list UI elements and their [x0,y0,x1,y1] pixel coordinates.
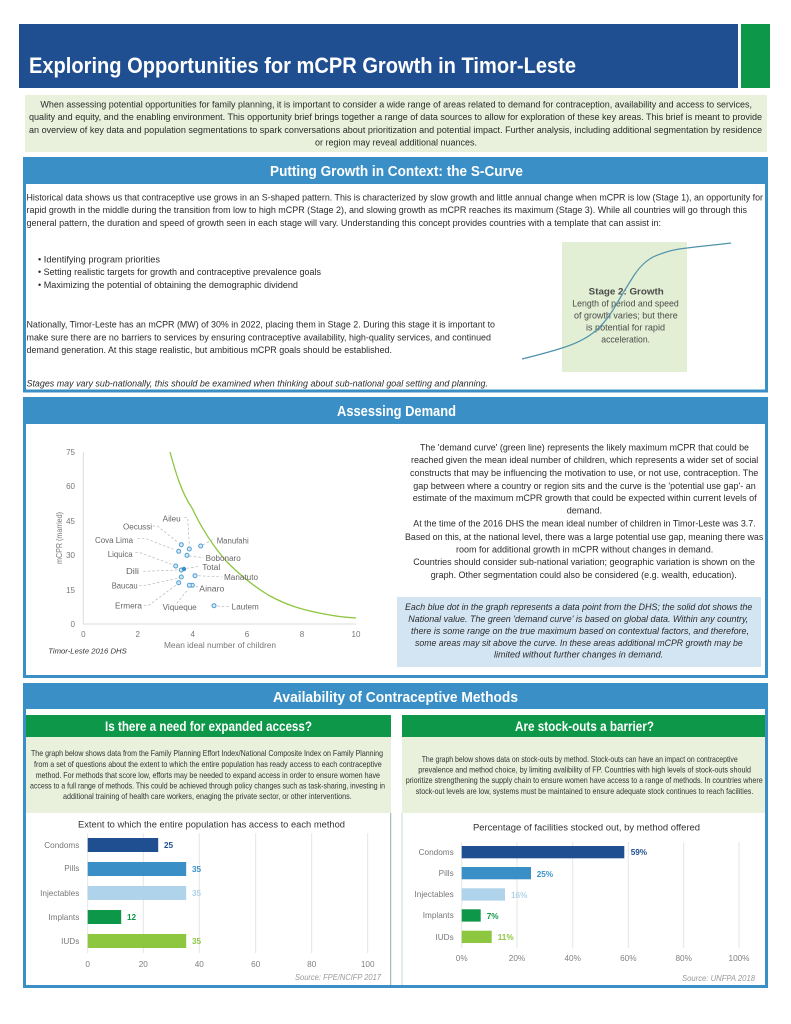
text block: demand curve explanation: gap between where a country or region sits and the curve is the 'potential use gap'- an [413,481,756,492]
chart: demand curve scatter: mCPR (married) [55,512,64,564]
panel: S-curve context [23,157,768,391]
stage 2 diagram: is potential for rapid [586,322,665,332]
italic note: Stages may vary sub-nationally, this should be examined when thinking about sub-national goal setting and planning. [26,378,488,390]
bar chart: access by method: 80 [307,960,317,969]
bar chart: stock-outs by method: 80% [676,954,692,963]
callout: reading the graph: there is some range on the true maximum based on contextual factors, and therefore, [411,626,749,637]
chart: demand curve scatter: 0 [71,620,76,629]
bar chart: stock-outs by method [415,822,756,983]
sub-heading: stock-outs: Are stock-outs a barrier? [515,719,654,734]
text block: expanded access [30,748,385,801]
bar chart: stock-outs by method: Injectables [415,890,454,899]
text block: demand curve explanation: estimate of the maximum mCPR growth that could be expected within current levels of [413,493,757,504]
intro text block: an overview of key data and population segmentations to spark conversations about prioritization and potential impact. Further analysis, including additional segmentation by residence [29,125,762,136]
bar chart: stock-outs by method: Source: UNFPA 2018 [682,974,756,983]
chart: demand curve scatter: 6 [245,630,250,639]
chart: demand curve scatter: 60 [66,482,76,491]
heading: S-curve: Putting Growth in Context: the S-Curve [270,164,523,180]
bar chart: access by method: Extent to which the entire population has access to each method [78,820,345,830]
bar chart: stock-outs by method: IUDs [435,933,454,942]
chart: demand curve scatter: 8 [300,630,305,639]
intro text block: When assessing potential opportunities for family planning, it is important to consider a wide range of areas related to demand for contraception, availability and access to services, [40,100,752,110]
chart: demand curve scatter: Lautem [232,602,259,611]
bar chart: access by method: Injectables [40,889,79,898]
sub-panel: stock-outs [402,715,765,985]
bar chart: stock-outs by method: 25% [537,870,554,879]
bar chart: stock-outs by method: Condoms [419,848,454,857]
text block: stock-outs [406,754,763,796]
stage 2 diagram: acceleration. [601,334,650,344]
chart: demand curve scatter: Mean ideal number of children [164,641,276,650]
chart: demand curve scatter: Viqueque [163,603,197,612]
bar chart: access by method: Source: FPE/NCIFP 2017 [295,973,382,982]
bar chart: stock-outs by method: 16% [511,891,528,900]
text block: national status: Nationally, Timor-Leste has an mCPR (MW) of 30% in 2022, placing them in Stage 2. During this stage it is important to [26,320,495,330]
text block: S-curve explanation: general pattern, the duration and speed of growth seen in each stage will vary. Understanding this concept provides countries with a template that can assist in: [26,218,661,229]
text block: demand curve explanation: At the time of the 2016 DHS the mean ideal number of children in Timor-Leste was 3.7. [413,518,756,530]
bar chart: access by method: 35 [192,937,202,946]
chart: demand curve scatter: 15 [66,586,76,595]
text block: expanded access: method. For methods that score low, efforts may be needed to expand access in order to ensure women have [36,770,380,780]
heading: assessing demand: Assessing Demand [337,404,456,420]
text block: S-curve explanation [26,192,764,229]
chart: demand curve scatter: 2 [135,630,140,639]
chart: demand curve scatter: 0 [81,630,86,639]
chart: demand curve scatter: Oecussi [123,523,152,532]
bar chart: access by method: Condoms [44,841,79,850]
bar chart: access by method: IUDs [61,937,79,946]
callout: reading the graph: National value. The green 'demand curve' is based on global data. Within any country, [408,614,748,625]
chart: demand curve scatter: Manufahi [217,536,249,545]
callout: reading the graph: some areas may sit above the curve. In these areas additional mCPR growth may be [415,638,743,649]
bar chart: access by method: 40 [195,960,204,969]
text block: demand curve explanation: demand. [567,506,602,517]
chart: demand curve scatter: Dili [126,567,139,576]
bar chart: stock-outs by method: 60% [620,954,636,963]
panel: availability of contraceptive methods [23,683,768,986]
intro text block [25,95,767,152]
bulleted list [38,254,321,291]
chart: demand curve scatter: 75 [66,448,76,457]
bulleted list: • Setting realistic targets for growth and contraceptive prevalence goals [38,267,321,278]
callout: reading the graph [397,597,761,667]
bar chart: stock-outs by method: 59% [631,848,648,857]
stage 2 diagram [522,242,731,372]
text block: demand curve explanation: reached given the mean ideal number of children, which represents a wider set of social [411,455,758,466]
sub-panel: expanded access [26,715,391,985]
heading: availability: Availability of Contraceptive Methods [273,690,518,706]
bar chart: stock-outs by method: 40% [565,954,581,963]
chart: demand curve scatter: 45 [66,517,76,526]
bar chart: stock-outs by method: Percentage of facilities stocked out, by method offered [473,822,700,834]
bar chart: stock-outs by method: 20% [509,954,525,963]
chart: demand curve scatter: Timor-Leste 2016 DHS [48,646,127,656]
bar chart: stock-outs by method: Pills [439,869,454,878]
chart: demand curve scatter: Liquica [108,550,133,559]
bar chart: access by method: Implants [48,913,79,922]
bar chart: access by method: 20 [139,960,148,969]
callout: reading the graph: limited without further changes in demand. [494,650,663,660]
panel: assessing demand [23,397,768,676]
bar chart: stock-outs by method: 0% [456,954,468,963]
title banner [19,24,770,88]
chart: demand curve scatter: Manatuto [224,573,259,582]
text block: expanded access: access to a full range of methods. This could be achieved through policy changes such as task-sharing, investing in [30,780,385,790]
chart: demand curve scatter: Ainaro [199,584,225,593]
bar chart: stock-outs by method: Implants [423,911,454,920]
chart: demand curve scatter [48,448,361,656]
bar chart: stock-outs by method: 7% [487,912,499,921]
chart: demand curve scatter: Bobonaro [206,554,241,563]
text block: demand curve explanation: room for additional growth in mCPR without changes in demand. [456,544,713,556]
bar chart: access by method: 35 [192,865,202,874]
title: Exploring Opportunities for mCPR Growth in Timor-Leste [29,53,576,78]
bulleted list: • Maximizing the potential of obtaining the demographic dividend [38,280,298,291]
chart: demand curve scatter: Total [202,563,221,572]
bar chart: stock-outs by method: 11% [498,933,514,942]
bar chart: access by method: 100 [361,960,375,969]
demand curve [170,452,356,618]
bar chart: access by method [40,820,382,982]
text block: demand curve explanation: Based on this, at the national level, there was a large potential use gap, meaning there was [405,532,763,543]
text block: S-curve explanation: rapid growth in the middle during the transition from low to high mCPR (Stage 2), and slowing growth as mCPR reaches its maximum (Stage 3). While all countries will go through this [26,205,747,216]
text block: national status: demand generation. At this stage realistic, but ambitious mCPR goals should be established. [26,345,392,356]
text block: national status: make sure there are no barriers to services by ensuring contraceptive availability, high-quality services, and continued [26,332,491,344]
stage 2 diagram: of growth varies; but there [574,310,678,320]
bulleted list: • Identifying program priorities [38,254,160,266]
bar chart: access by method: 35 [192,889,202,898]
text block: expanded access: from a set of questions about the extent to which the entire population has ready access to each contraceptive [34,759,382,769]
bar chart: access by method: 12 [127,913,137,922]
bar chart: access by method: 0 [85,960,90,969]
chart: demand curve scatter: Cova Lima [95,536,134,545]
text block: demand curve explanation: Countries should consider sub-national variation; geographic variation is shown on the [413,557,755,568]
stage 2 diagram: Length of period and speed [572,298,679,308]
chart: demand curve scatter: 10 [352,630,361,639]
stage 2 diagram: Stage 2: Growth [589,286,664,296]
chart: demand curve scatter: 4 [190,630,195,639]
intro text block: quality and equity, and the enabling environment. This opportunity brief brings together a range of data sources to allow for exploration of these key areas. This brief is meant to provide [29,112,762,123]
text block: expanded access: The graph below shows data from the Family Planning Effort Index/National Composite Index on Family Planning [31,748,383,758]
sub-heading: expanded access: Is there a need for expanded access? [105,719,312,734]
chart: demand curve scatter: Ermera [115,601,143,610]
chart: demand curve scatter: 30 [66,551,76,560]
text block: demand curve explanation [405,442,763,581]
callout: reading the graph: Each blue dot in the graph represents a data point from the DHS; the solid dot shows the [405,602,752,613]
intro text block: or region may reveal additional nuances. [315,138,477,148]
text block: national status [26,320,495,356]
bar chart: access by method: 25 [164,841,174,850]
text block: demand curve explanation: constructs that may be influencing the motivation to use, or not use, contraception. The [410,468,758,479]
chart: demand curve scatter: Aileu [163,514,181,523]
text block: demand curve explanation: graph. Other segmentation could also be considered (e.g. wealth, education). [431,570,737,581]
chart: demand curve scatter: Baucau [112,582,138,591]
bar chart: access by method: 60 [251,960,261,969]
bar chart: access by method: Pills [64,864,79,873]
text block: expanded access: additional training of health care workers, enaging the private sector, or other interventions. [63,791,352,801]
text block: demand curve explanation: The 'demand curve' (green line) represents the likely maximum mCPR that could be [420,442,749,454]
bar chart: stock-outs by method: 100% [729,954,749,963]
